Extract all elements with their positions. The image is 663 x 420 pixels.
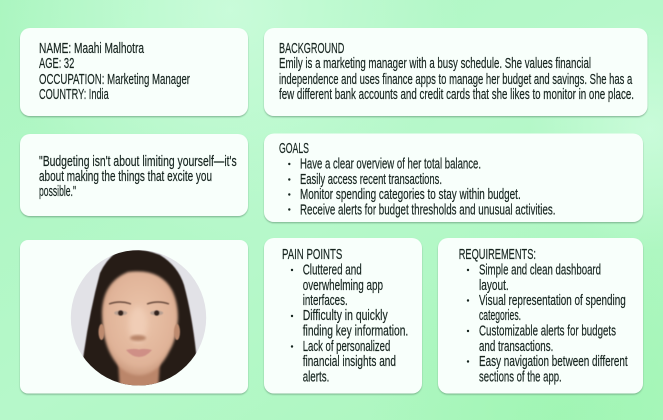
pain points list: interfaces.	[303, 293, 348, 309]
panel: requirements	[438, 238, 643, 394]
requirements list	[467, 262, 628, 386]
portrait photo	[70, 249, 207, 392]
profile text	[39, 41, 190, 103]
pain points heading: PAIN POINTS	[282, 247, 342, 263]
goals list: Easily access recent transactions.	[300, 172, 442, 188]
panel: quote	[20, 134, 248, 216]
goals list: Monitor spending categories to stay within budget.	[300, 187, 521, 203]
pain points list: overwhelming app	[303, 278, 383, 294]
requirements list: and transactions.	[479, 339, 553, 355]
pain points list	[291, 262, 408, 386]
panel: goals	[264, 134, 643, 222]
requirements list: Simple and clean dashboard	[479, 262, 601, 278]
background heading: BACKGROUND	[279, 41, 344, 57]
profile text: OCCUPATION: Marketing Manager	[39, 72, 190, 88]
requirements list: layout.	[479, 278, 509, 294]
quote text	[39, 154, 237, 200]
requirements list: categories.	[479, 308, 521, 324]
pain points list: Lack of personalized	[303, 339, 390, 355]
profile text: COUNTRY: India	[39, 87, 109, 103]
panel: background	[264, 28, 648, 116]
profile text: NAME: Maahi Malhotra	[39, 41, 145, 57]
panel: photo	[20, 240, 248, 394]
quote text: "Budgeting isn't about limiting yourself—it's	[39, 154, 237, 170]
pain points list: Cluttered and	[303, 262, 362, 278]
pain points list: finding key information.	[303, 324, 408, 340]
quote text: about making the things that excite you	[39, 169, 212, 185]
panel: profile	[20, 28, 248, 116]
goals heading: GOALS	[279, 141, 309, 157]
goals list	[288, 156, 556, 218]
panel: pain points	[264, 238, 422, 394]
quote text: possible."	[39, 184, 76, 200]
profile text: AGE: 32	[39, 56, 74, 72]
goals list: Have a clear overview of her total balance.	[300, 156, 481, 172]
pain points list: alerts.	[303, 370, 329, 386]
background text	[279, 56, 634, 103]
requirements list: sections of the app.	[479, 370, 562, 386]
requirements heading: REQUIREMENTS:	[459, 247, 536, 263]
pain points list: Difficulty in quickly	[303, 308, 388, 324]
pain points list: financial insights and	[303, 354, 396, 370]
